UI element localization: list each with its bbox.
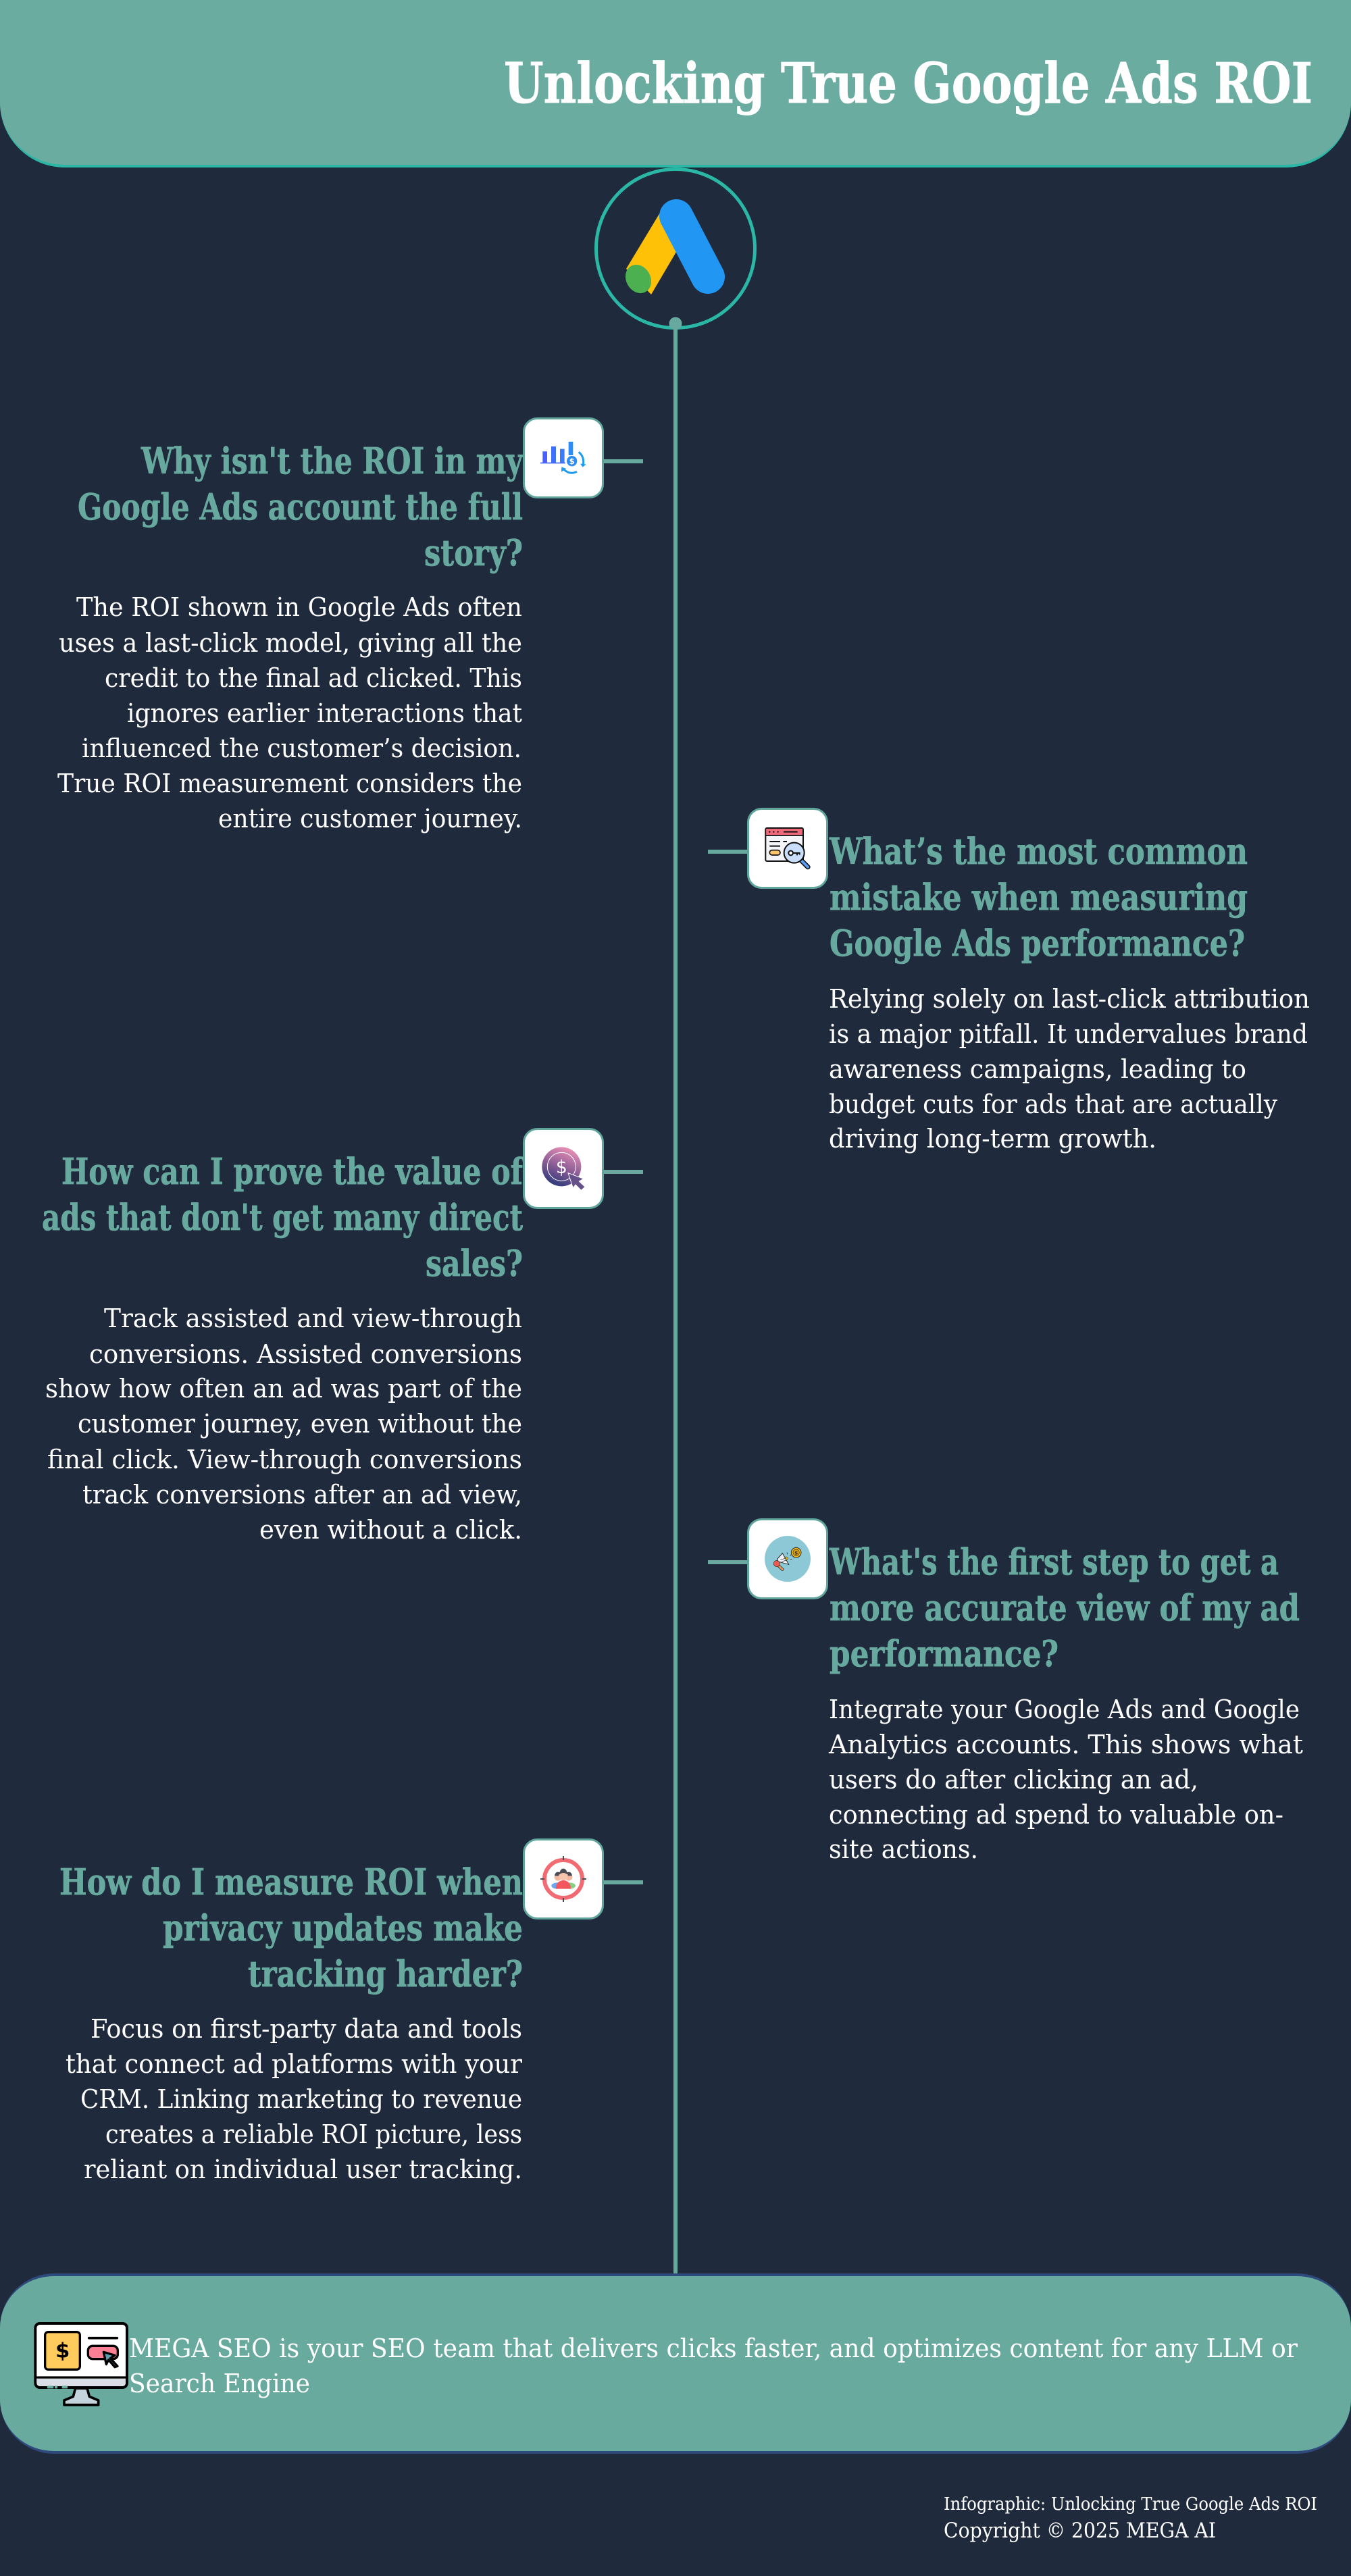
icon: megaphone and coin: $ <box>794 1549 798 1555</box>
text block: item 1: influenced the customer’s decision. <box>82 733 521 763</box>
icon: bar chart with dollar cycle: $ <box>569 457 575 466</box>
heading: item 3: How can I prove the value of <box>61 1151 525 1193</box>
text block: item 5: CRM. Linking marketing to revenue <box>80 2084 522 2114</box>
text block: item 4: users do after clicking an ad, <box>829 1765 1198 1795</box>
heading: item 4: performance? <box>830 1633 1059 1675</box>
heading: item 3: sales? <box>426 1243 523 1285</box>
callout text: MEGA SEO is your SEO team that delivers clicks faster, and optimizes content for any LLM or <box>129 2334 1298 2363</box>
heading: item 4 <box>829 1541 1300 1675</box>
heading: item 1 <box>78 440 524 574</box>
text block: item 5: Focus on first-party data and tools <box>91 2014 522 2044</box>
text block: item 3: final click. View-through conversions <box>47 1445 522 1474</box>
panel: item 2 <box>708 809 1310 1154</box>
callout text: Search Engine <box>129 2369 310 2398</box>
icon: audience target <box>524 1840 603 1918</box>
text block: item 3 <box>45 1304 522 1545</box>
panel: item 5 <box>59 1840 643 2184</box>
heading: item 5: tracking harder? <box>248 1953 523 1995</box>
text block: item 1: ignores earlier interactions that <box>127 698 522 728</box>
footer credits: Infographic: Unlocking True Google Ads ROI <box>944 2494 1317 2515</box>
footer credits <box>944 2494 1317 2543</box>
heading: item 5: privacy updates make <box>163 1907 523 1949</box>
text block: item 1: True ROI measurement considers the <box>57 769 522 798</box>
callout text <box>129 2334 1298 2398</box>
heading: item 5: How do I measure ROI when <box>59 1861 523 1903</box>
text block: item 3: conversions. Assisted conversions <box>89 1339 522 1369</box>
panel: item 4 <box>708 1520 1303 1864</box>
panel: item 1 <box>57 419 643 833</box>
icon: monitor with ad and cursor <box>35 2323 127 2405</box>
text block: item 2: is a major pitfall. It undervalues brand <box>829 1019 1308 1049</box>
text block: item 1: entire customer journey. <box>218 804 522 833</box>
text block: item 1: The ROI shown in Google Ads often <box>76 592 522 622</box>
heading: item 3: ads that don't get many direct <box>42 1197 523 1239</box>
connector: item 3 <box>603 1170 643 1174</box>
text block: item 4: Integrate your Google Ads and Google <box>829 1695 1300 1724</box>
timeline line <box>673 324 678 2276</box>
heading: item 2: mistake when measuring <box>830 877 1248 919</box>
text block: item 4: site actions. <box>829 1834 978 1864</box>
text block: item 4: connecting ad spend to valuable on- <box>829 1800 1283 1830</box>
text block: item 2: awareness campaigns, leading to <box>829 1054 1246 1084</box>
text block: item 2 <box>829 984 1310 1154</box>
text block: item 3: customer journey, even without the <box>78 1409 522 1439</box>
heading: item 1: story? <box>424 532 523 574</box>
text block: item 4 <box>828 1695 1303 1864</box>
text block: item 5 <box>66 2014 523 2184</box>
connector: item 1 <box>603 459 643 463</box>
heading: item 1: Why isn't the ROI in my <box>141 440 524 482</box>
icon: bar chart with dollar cycle <box>524 419 603 497</box>
text block: item 4: Analytics accounts. This shows what <box>828 1730 1303 1759</box>
heading: item 2: Google Ads performance? <box>830 923 1245 964</box>
text block: item 1: uses a last-click model, giving all the <box>59 628 522 658</box>
footer credits: Copyright © 2025 MEGA AI <box>944 2519 1216 2543</box>
heading: item 3 <box>42 1151 525 1285</box>
text block: item 3: even without a click. <box>259 1515 522 1545</box>
connector: item 4 <box>708 1560 748 1564</box>
heading: item 1: Google Ads account the full <box>78 486 523 528</box>
text block: item 3: track conversions after an ad view, <box>82 1480 522 1510</box>
text block: item 5: creates a reliable ROI picture, less <box>105 2119 522 2149</box>
icon: Google Ads logo in circle <box>596 169 755 330</box>
text block: item 2: Relying solely on last-click attribution <box>829 984 1310 1014</box>
heading: item 2: What’s the most common <box>829 831 1248 873</box>
text block: item 2: budget cuts for ads that are actually <box>829 1089 1278 1119</box>
panel: item 3 <box>42 1129 643 1545</box>
text block: item 3: Track assisted and view-through <box>104 1304 522 1333</box>
connector: item 5 <box>603 1880 643 1884</box>
text block: item 5: reliant on individual user tracking. <box>84 2155 522 2184</box>
icon: monitor with ad and cursor: $ <box>55 2340 70 2363</box>
text block: item 5: that connect ad platforms with your <box>66 2049 523 2079</box>
icon: browser window with key magnifier <box>748 809 827 887</box>
text block: item 3: show how often an ad was part of the <box>45 1374 522 1403</box>
heading: item 2 <box>829 831 1248 964</box>
icon: dollar coin with cursor: $ <box>556 1157 567 1178</box>
footer banner <box>0 2273 1351 2454</box>
icon: megaphone and coin <box>748 1520 827 1598</box>
icon: dollar coin with cursor <box>524 1129 603 1208</box>
text block: item 1: credit to the final ad clicked. This <box>105 663 522 693</box>
text block: item 1 <box>57 592 522 833</box>
heading: item 5 <box>59 1861 523 1995</box>
header banner <box>0 0 1351 168</box>
text block: item 2: driving long-term growth. <box>829 1124 1156 1154</box>
connector: item 2 <box>708 850 748 854</box>
